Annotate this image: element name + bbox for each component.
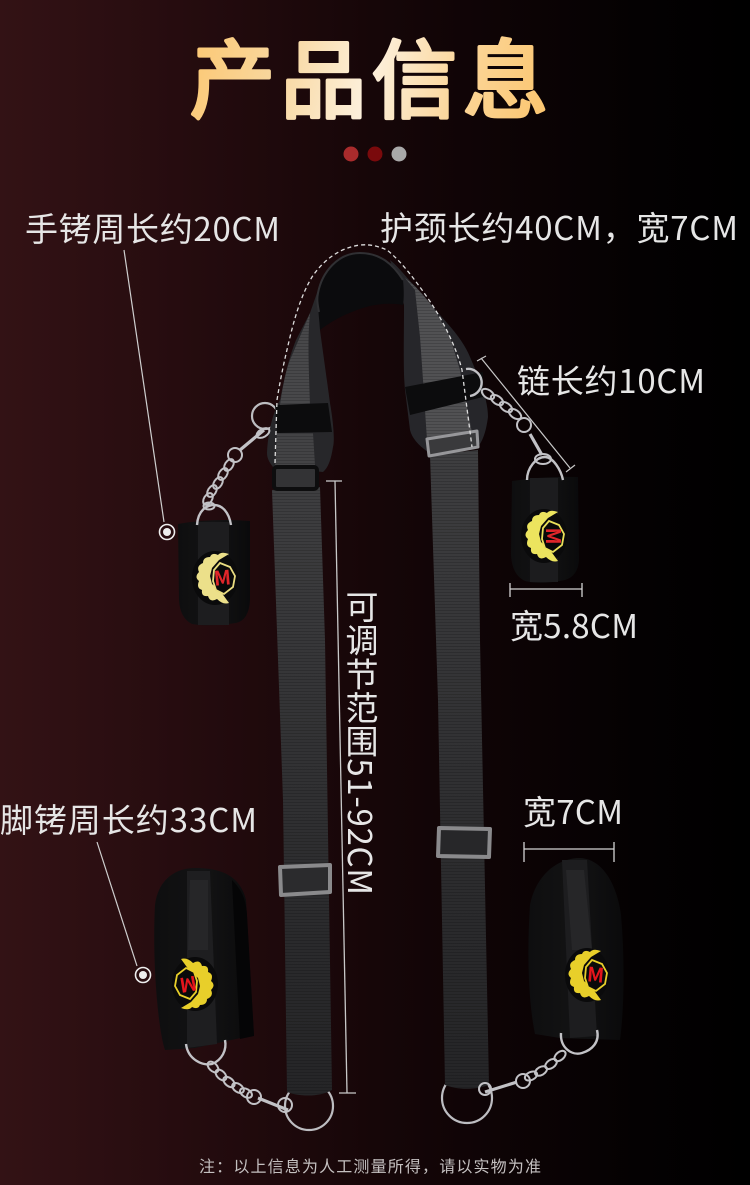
bottom right cuff xyxy=(528,858,624,1040)
cuff center strip xyxy=(562,860,597,1038)
cuff center strip xyxy=(187,871,217,1048)
top right chain xyxy=(466,369,563,480)
bottom left chain xyxy=(186,1040,292,1112)
title: 产品信息 xyxy=(190,13,548,136)
label: ankle cuff width: 宽7CM xyxy=(523,786,623,834)
logo: M xyxy=(586,958,606,989)
decorative dots xyxy=(344,146,406,162)
left shoulder pad xyxy=(267,290,334,472)
footnote: 注：以上信息为人工测量所得，请以实物为准 xyxy=(199,1153,541,1177)
dimension line: ankle cuff width xyxy=(524,842,614,862)
cuff strip highlight xyxy=(566,870,592,950)
label: wrist cuff width: 宽5.8CM xyxy=(510,600,638,648)
neck pad rim xyxy=(317,253,403,312)
bottom right chain xyxy=(479,1030,598,1095)
logo xyxy=(565,948,609,1002)
dimension line: wrist cuff width xyxy=(510,583,582,597)
logo: M xyxy=(540,527,569,545)
harness: neck pad and shoulder straps xyxy=(267,253,490,1096)
upper right silver buckle xyxy=(427,431,478,456)
cuff body xyxy=(511,477,579,583)
lower right silver buckle xyxy=(438,828,490,857)
label: wrist cuff circumference: 手铐周长约20CM xyxy=(25,203,280,251)
lower left silver buckle xyxy=(280,865,330,895)
cuff body xyxy=(528,858,624,1040)
top left cuff xyxy=(178,520,250,625)
metal rings behind straps xyxy=(252,403,492,1130)
logo: M xyxy=(212,561,232,592)
callout: ankle cuff leader line xyxy=(97,842,150,982)
right mesh webbing xyxy=(405,372,483,415)
top left chain xyxy=(197,426,271,525)
neck pad black inner xyxy=(318,253,404,330)
cuff center strip xyxy=(198,522,229,625)
cuff strip highlight xyxy=(188,880,208,950)
left long strap xyxy=(272,487,332,1096)
dimension line: adjustable strap xyxy=(326,481,356,1093)
upper left dark buckle xyxy=(274,467,317,489)
logo: M xyxy=(178,970,199,1001)
callout: wrist cuff leader line xyxy=(124,250,174,540)
cuff body xyxy=(154,868,254,1050)
neck dashed outline xyxy=(275,245,472,463)
right long strap xyxy=(430,450,489,1089)
left lower shoulder segment xyxy=(275,433,315,465)
right shoulder gray band xyxy=(405,278,472,440)
label: chain length: 链长约10CM xyxy=(517,355,705,403)
cuff body xyxy=(178,520,250,625)
dimension line: chain xyxy=(477,356,575,472)
label: adjustable range: 可调节范围51-92CM xyxy=(338,590,386,895)
cuff center strip xyxy=(530,478,558,582)
cuff inner edge xyxy=(232,880,254,1039)
label: ankle cuff circumference: 脚铐周长约33CM xyxy=(0,794,257,842)
logo xyxy=(172,957,218,1011)
left shoulder gray band xyxy=(280,313,310,405)
top right cuff xyxy=(511,477,579,583)
bottom left cuff xyxy=(154,868,254,1050)
right shoulder pad xyxy=(390,260,488,452)
left mesh webbing xyxy=(275,403,332,433)
label: neck guard size: 护颈长约40CM，宽7CM xyxy=(380,202,738,250)
